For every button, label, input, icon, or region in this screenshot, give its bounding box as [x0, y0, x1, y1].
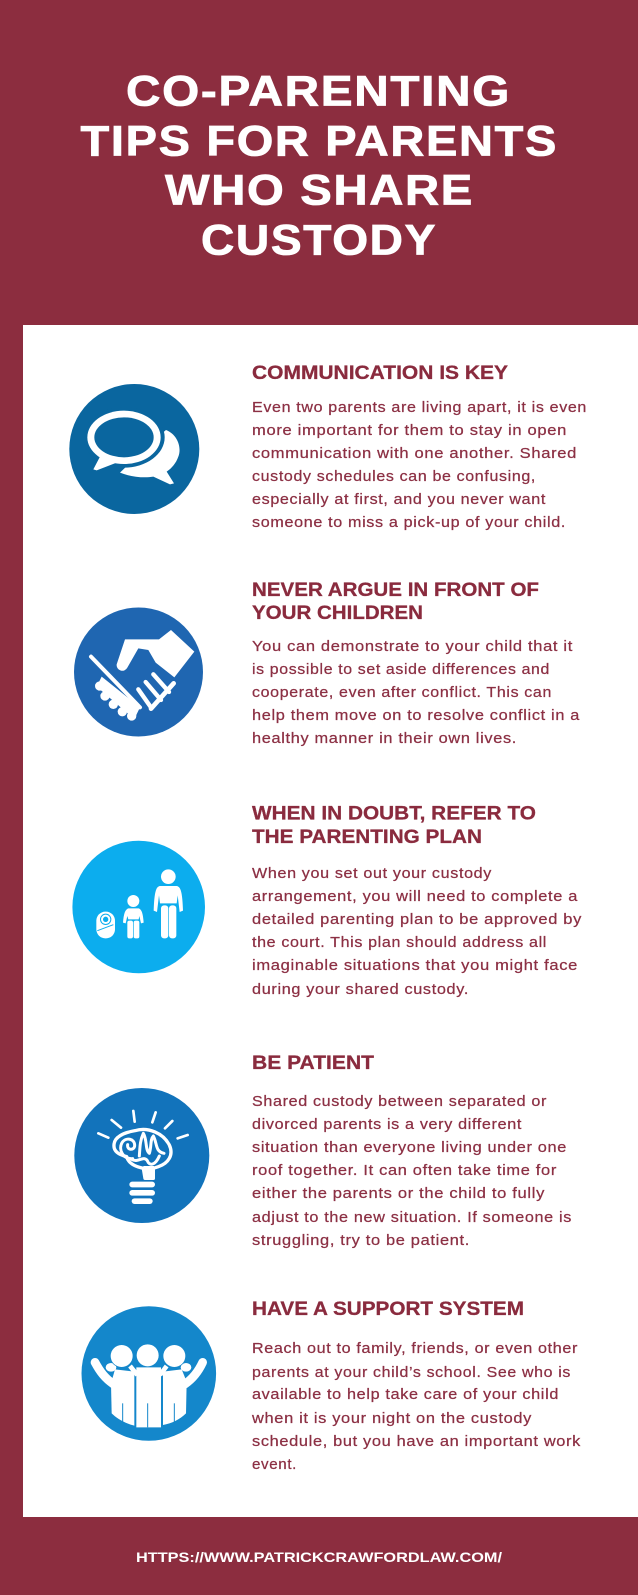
body text: struggling, try to be patient.: [252, 1233, 470, 1249]
body text: divorced parents is a very different: [252, 1117, 522, 1133]
body text: Shared custody between separated or: [252, 1094, 547, 1110]
body text: adjust to the new situation. If someone is: [252, 1210, 572, 1226]
body text: available to help take care of your child: [252, 1387, 559, 1403]
body text: imaginable situations that you might face: [252, 958, 578, 974]
panel: have a support system: [82, 1298, 581, 1473]
body text: during your shared custody.: [252, 982, 469, 998]
body text: cooperate, even after conflict. This can: [252, 685, 552, 701]
body text: schedule, but you have an important work: [252, 1434, 581, 1450]
icon: handshake: [74, 608, 203, 736]
title: TIPS FOR PARENTS: [80, 118, 558, 166]
title: CO-PARENTING: [126, 68, 511, 116]
body text: custody schedules can be confusing,: [252, 469, 536, 485]
icon: brain light bulb: [74, 1088, 209, 1223]
body text: Even two parents are living apart, it is even: [252, 400, 587, 416]
body text: communication with one another. Shared: [252, 446, 577, 462]
body text: You can demonstrate to your child that it: [252, 639, 573, 655]
body text: when it is your night on the custody: [251, 1411, 532, 1427]
body text: [252, 400, 587, 531]
panel: never argue in front of your children: [74, 579, 580, 747]
icon: speech bubbles: [69, 384, 199, 514]
body text: Reach out to family, friends, or even other: [252, 1341, 578, 1357]
title: WHO SHARE: [165, 168, 474, 214]
body text: is possible to set aside differences and: [252, 662, 550, 678]
body text: the court. This plan should address all: [252, 935, 547, 951]
body text: either the parents or the child to fully: [252, 1186, 545, 1202]
heading: THE PARENTING PLAN: [252, 826, 482, 848]
icon: group of three people: [82, 1306, 216, 1441]
body text: [252, 1094, 572, 1249]
body text: help them move on to resolve conflict in a: [252, 708, 580, 724]
body text: [252, 866, 582, 998]
panel: communication is key: [69, 362, 587, 531]
heading: BE PATIENT: [252, 1052, 374, 1074]
body text: [251, 1341, 581, 1473]
panel: be patient: [74, 1052, 572, 1249]
body text: more important for them to stay in open: [252, 423, 567, 439]
white content panel: [23, 325, 638, 1517]
body text: roof together. It can often take time for: [252, 1163, 557, 1179]
body text: parents at your child’s school. See who is: [252, 1365, 571, 1381]
body text: situation than everyone living under one: [252, 1140, 567, 1156]
body text: detailed parenting plan to be approved by: [252, 912, 582, 928]
heading: [252, 579, 539, 624]
panel: when in doubt, refer to the parenting plan: [72, 802, 582, 998]
title: CUSTODY: [201, 218, 437, 264]
body text: event.: [252, 1457, 297, 1473]
heading: NEVER ARGUE IN FRONT OF: [252, 579, 539, 601]
heading: COMMUNICATION IS KEY: [252, 362, 508, 384]
body text: When you set out your custody: [252, 866, 492, 882]
body text: arrangement, you will need to complete a: [252, 889, 578, 905]
body text: someone to miss a pick-up of your child.: [252, 515, 566, 531]
body text: [252, 639, 580, 747]
footer url: HTTPS://WWW.PATRICKCRAWFORDLAW.COM/: [136, 1549, 502, 1565]
title: [80, 68, 558, 264]
heading: WHEN IN DOUBT, REFER TO: [252, 802, 536, 824]
body text: healthy manner in their own lives.: [252, 731, 517, 747]
body text: especially at first, and you never want: [252, 492, 546, 508]
heading: [252, 802, 536, 848]
heading: HAVE A SUPPORT SYSTEM: [252, 1298, 524, 1320]
heading: YOUR CHILDREN: [252, 602, 423, 624]
icon: family of three figures: [72, 841, 205, 973]
